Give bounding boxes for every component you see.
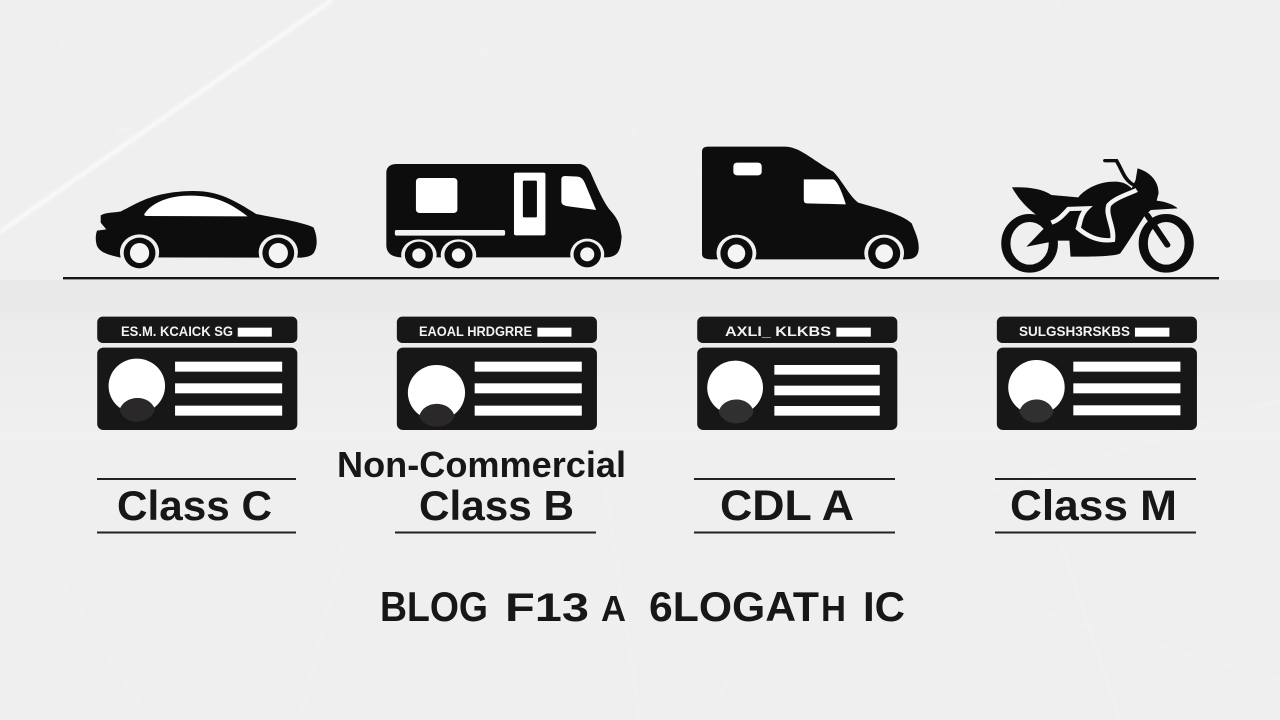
label: CDL A: CDL A xyxy=(720,482,854,530)
road line xyxy=(63,277,1219,279)
label: Non-Commercial Class B xyxy=(337,444,626,534)
footer caption: 6LOGAT xyxy=(649,583,819,630)
license card: CDL A xyxy=(697,317,897,430)
footer caption: F13 xyxy=(505,586,589,630)
license card: Class B: EAOAL HRDGRRE xyxy=(419,324,532,339)
label: Non-Commercial Class B: Class B xyxy=(419,482,574,529)
license card: CDL A: AXLI_ KLKBS xyxy=(725,324,831,339)
footer caption: A xyxy=(601,588,626,629)
icon: truck xyxy=(702,147,919,271)
label: Class C: Class C xyxy=(117,482,272,529)
label: Class M: Class M xyxy=(1010,482,1177,530)
footer caption: BLOG xyxy=(380,583,488,630)
license card: Class M: SULGSH3RSKBS xyxy=(1019,324,1130,339)
license card: Class B xyxy=(397,317,597,430)
footer caption xyxy=(380,583,905,630)
icon: car xyxy=(96,191,317,270)
license card: Class C: ES.M. KCAICK SG xyxy=(121,324,233,339)
footer caption: IC xyxy=(863,583,905,630)
license card: Class C xyxy=(97,317,297,430)
footer caption: H xyxy=(821,588,846,629)
icon: motorcycle xyxy=(1006,161,1189,269)
license card: Class M xyxy=(997,317,1197,430)
label: Non-Commercial Class B: Non-Commercial xyxy=(337,444,626,485)
icon: RV camper xyxy=(386,164,622,271)
